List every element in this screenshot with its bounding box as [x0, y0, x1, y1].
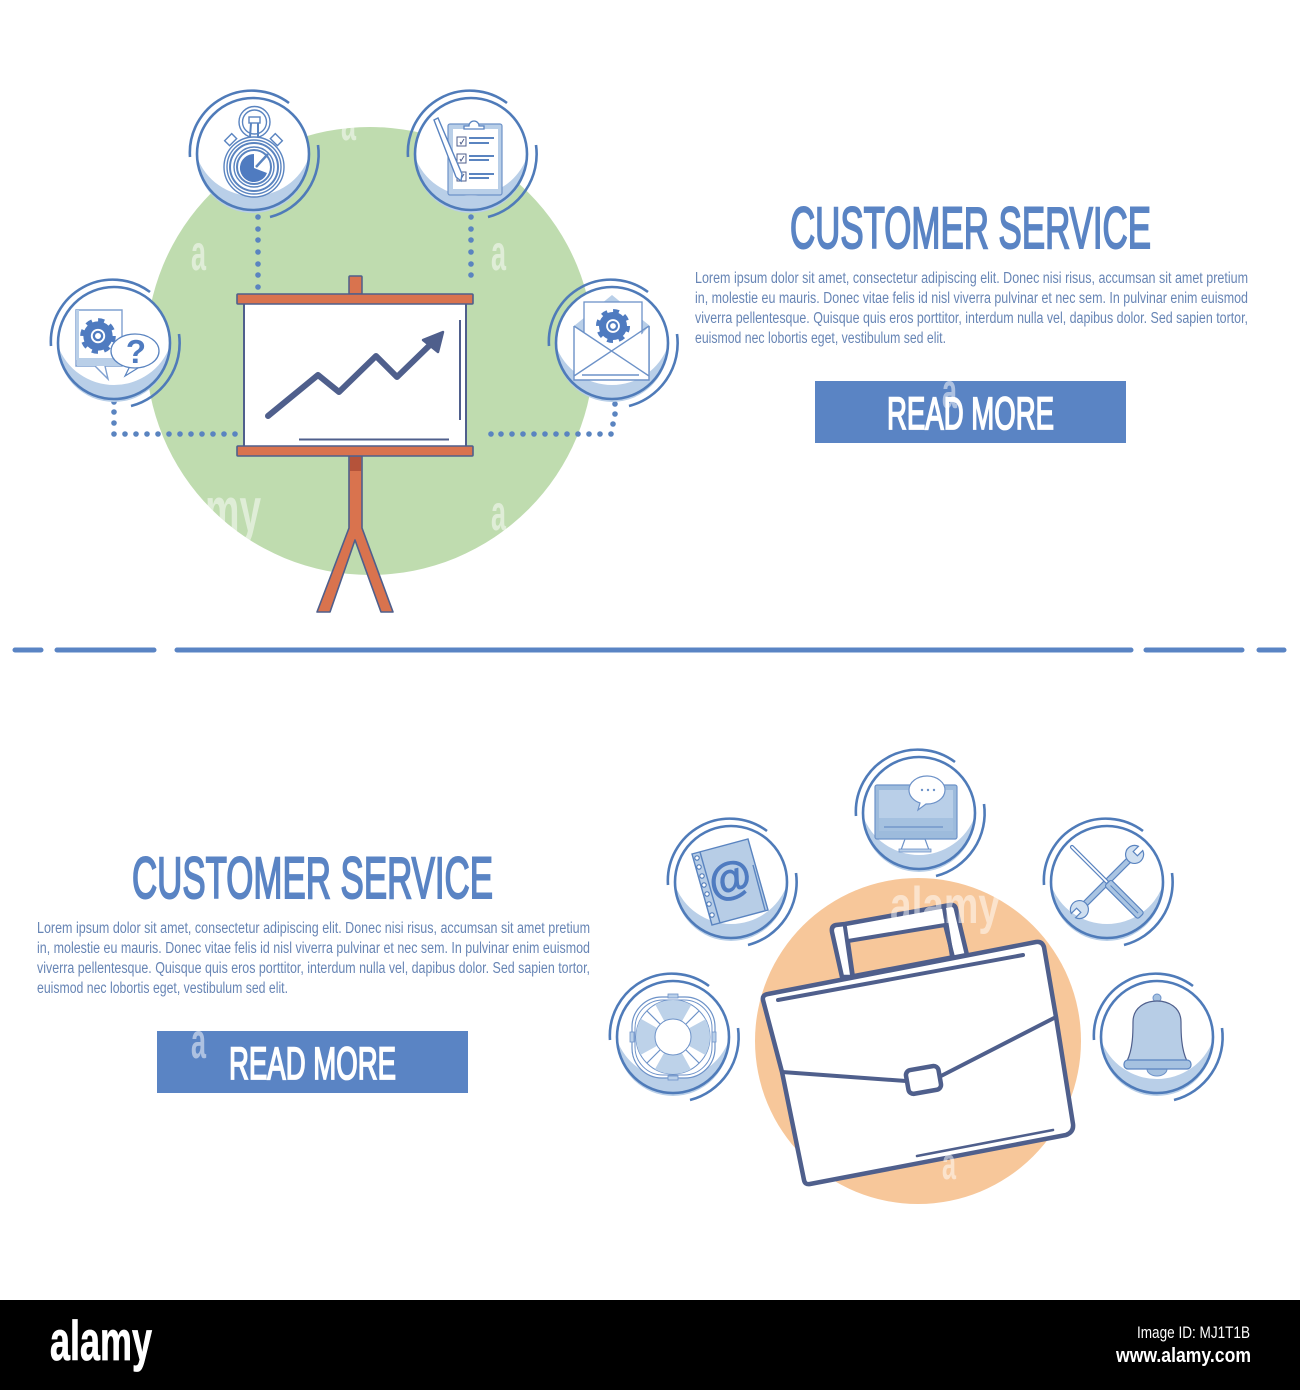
footer logo: alamy — [50, 1309, 152, 1372]
orange background circle — [755, 878, 1081, 1204]
text block: euismod nec lobortis eget, vestibulum sed elit. — [37, 980, 288, 997]
heading: CUSTOMER SERVICE — [132, 846, 493, 911]
question mark: ? — [126, 333, 146, 370]
icon: briefcase — [763, 905, 1073, 1184]
text block — [695, 270, 1248, 347]
button: read more — [815, 381, 1126, 443]
watermarks: a — [491, 485, 507, 541]
button: read more: a — [191, 1013, 207, 1069]
panel: top banner — [51, 91, 1248, 612]
green background circle — [146, 127, 594, 575]
watermarks — [191, 95, 507, 545]
image id: Image ID: MJ1T1B — [1137, 1323, 1250, 1342]
watermarks: my — [205, 476, 261, 545]
icon badge: gear and question speech bubbles — [51, 280, 180, 406]
button: read more — [157, 1031, 468, 1093]
watermarks: a — [942, 1138, 957, 1189]
watermarks: a — [191, 225, 207, 281]
at sign: @ — [703, 849, 757, 908]
footer bar — [0, 1300, 1300, 1390]
panel: bottom banner — [37, 750, 1223, 1204]
text block: in, molestie eu mauris. Donec vitae felis id nisl viverra pulvinar et nec sem. In pulvinar enim euismod — [37, 940, 590, 957]
icon badge: checklist clipboard — [408, 91, 537, 217]
icon: presentation board with rising chart — [237, 276, 473, 612]
icon badge: bell — [1094, 974, 1223, 1100]
text block — [37, 920, 590, 997]
text block: Lorem ipsum dolor sit amet, consectetur adipiscing elit. Donec nisi risus, accumsan sit amet pretium — [37, 920, 590, 937]
icon badge: monitor with chat bubble — [856, 750, 985, 876]
button: read more: a — [942, 363, 958, 419]
button: read more: READ MORE — [229, 1038, 396, 1089]
icon badge: lifebuoy — [610, 974, 739, 1100]
icon badge: address book — [668, 819, 797, 945]
icon badge: crossed tools — [1044, 819, 1173, 945]
watermarks: alamy — [890, 877, 1000, 935]
site url: www.alamy.com — [1115, 1345, 1251, 1367]
text block: viverra pellentesque. Quisque quis eros porttitor, interdum nulla vel, dapibus dolor. Sed sapien tortor, — [37, 960, 590, 977]
text block: euismod nec lobortis eget, vestibulum sed elit. — [695, 330, 946, 347]
button: read more: READ MORE — [887, 388, 1054, 439]
watermarks: a — [491, 225, 507, 281]
watermarks — [890, 877, 1000, 1189]
icon badge: envelope with gear — [549, 280, 678, 406]
dotted connectors — [111, 214, 618, 437]
icon badge: stopwatch — [190, 91, 319, 217]
watermarks: a — [341, 95, 357, 151]
